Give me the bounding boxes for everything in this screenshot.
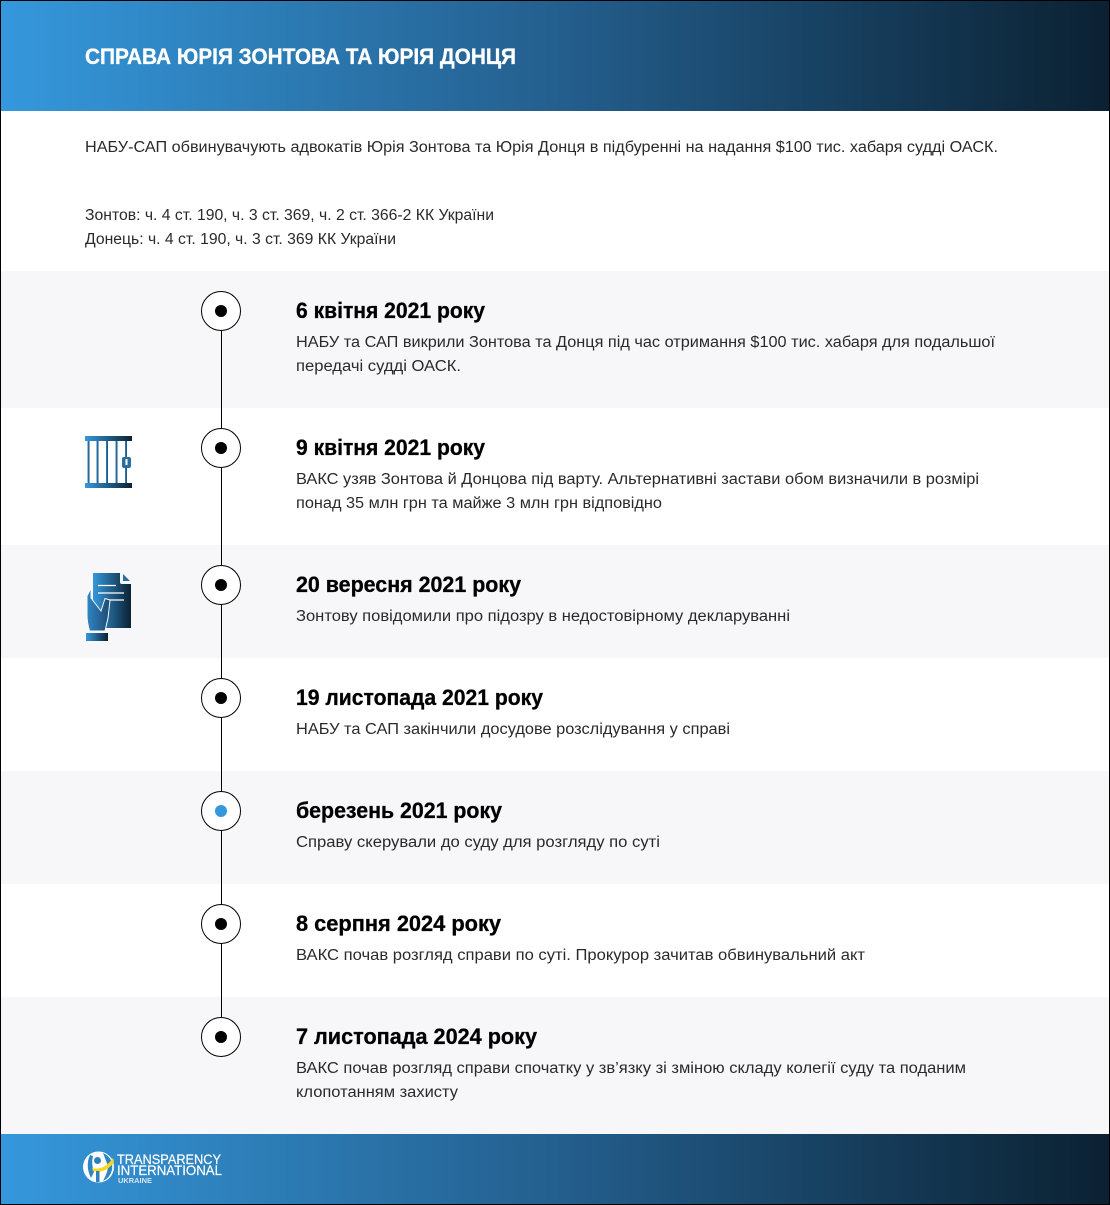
- row bands: [1, 271, 1109, 1134]
- timeline line: [220, 311, 222, 1037]
- event: 19 November 2021: [202, 678, 730, 738]
- event: 8 August 2024: [202, 904, 865, 964]
- event: 7 November 2024: клопотанням захисту: [296, 1084, 458, 1101]
- event: 8 August 2024: ВАКС почав розгляд справи по суті. Прокурор зачитав обвинувальний акт: [296, 947, 865, 964]
- event: March 2021: Справу скерували до суду для розгляду по суті: [296, 834, 660, 851]
- intro text: НАБУ-САП обвинувачують адвокатів Юрія Зонтова та Юрія Донця в підбуренні на надання $100 тис. хабаря судді ОАСК.: [85, 139, 998, 156]
- charges text: [85, 207, 494, 248]
- event: March 2021: березень 2021 року: [296, 798, 503, 823]
- logo: Transparency International Ukraine: TRANSPARENCY: [117, 1151, 222, 1167]
- event: 6 April 2021: 6 квітня 2021 року: [296, 298, 486, 323]
- title: СПРАВА ЮРІЯ ЗОНТОВА ТА ЮРІЯ ДОНЦЯ: [85, 44, 516, 69]
- event: 8 August 2024: 8 серпня 2024 року: [296, 911, 502, 936]
- logo: Transparency International Ukraine: [83, 1151, 222, 1185]
- event: 9 April 2021: [202, 428, 979, 512]
- event: 9 April 2021: понад 35 млн грн та майже 3 млн грн відповідно: [296, 495, 662, 512]
- charges text: Донець: ч. 4 ст. 190, ч. 3 ст. 369 КК України: [85, 231, 396, 248]
- header band: [1, 1, 1109, 111]
- event: 20 September 2021: Зонтову повідомили про підозру в недостовірному декларуванні: [296, 608, 790, 625]
- event: 7 November 2024: ВАКС почав розгляд справи спочатку у зв’язку зі зміною складу колегії суду та поданим: [296, 1060, 966, 1077]
- event: 9 April 2021: ВАКС узяв Зонтова й Донцова під варту. Альтернативні застави обом визначили в розмірі: [296, 471, 979, 488]
- event: 19 November 2021: 19 листопада 2021 року: [296, 685, 544, 710]
- logo: Transparency International Ukraine: INTERNATIONAL: [117, 1162, 222, 1178]
- event: 7 November 2024: [202, 1018, 966, 1101]
- event: 6 April 2021: передачі судді ОАСК.: [296, 358, 461, 375]
- event: March 2021: [202, 792, 660, 851]
- icon: hand holding document: [86, 573, 131, 641]
- event: 7 November 2024: 7 листопада 2024 року: [296, 1024, 538, 1049]
- logo: Transparency International Ukraine: UKRAINE: [118, 1178, 152, 1185]
- event: 6 April 2021: НАБУ та САП викрили Зонтова та Донця під час отримання $100 тис. хабаря для подальшої: [296, 334, 996, 351]
- charges text: Зонтов: ч. 4 ст. 190, ч. 3 ст. 369, ч. 2 ст. 366-2 КК України: [85, 207, 494, 224]
- event: 6 April 2021: [202, 292, 996, 375]
- event: 20 September 2021: 20 вересня 2021 року: [296, 572, 522, 597]
- event: 19 November 2021: НАБУ та САП закінчили досудове розслідування у справі: [296, 721, 730, 738]
- event: 9 April 2021: 9 квітня 2021 року: [296, 435, 486, 460]
- footer band: [1, 1134, 1109, 1204]
- icon: prison bars: [85, 436, 132, 488]
- event: 20 September 2021: [202, 566, 790, 625]
